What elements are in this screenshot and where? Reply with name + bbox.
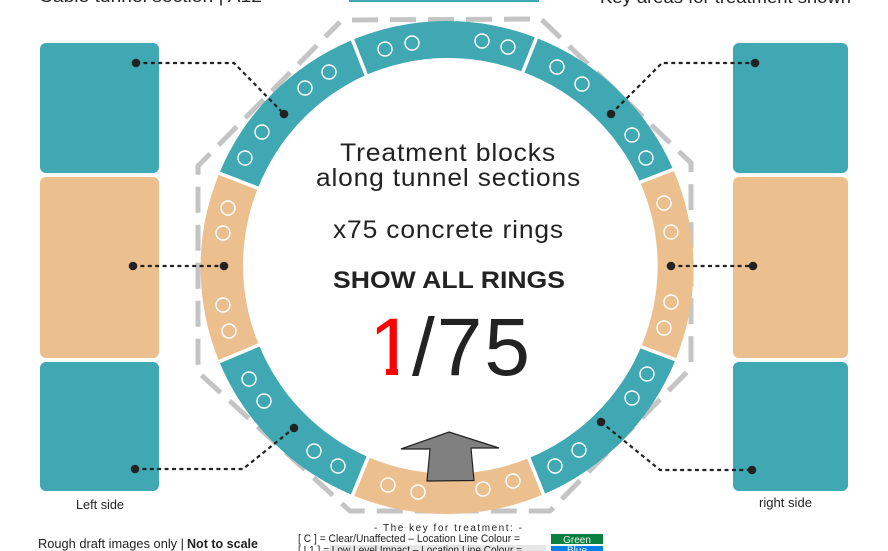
panel: right side blocks <box>733 43 848 491</box>
top centre bar <box>349 0 539 2</box>
leader: middle left <box>129 262 228 270</box>
segment: left <box>201 173 259 362</box>
ring counter <box>376 316 527 376</box>
leader: upper left <box>132 59 288 118</box>
segment: bottom <box>353 457 543 514</box>
caption: right side: right side <box>759 496 812 510</box>
ring counter: 1 <box>369 302 415 393</box>
caption: left side: Left side <box>76 498 124 512</box>
ring bolt holes <box>216 34 678 499</box>
note: not to scale: Rough draft images only | <box>38 536 184 551</box>
arrow pointing up <box>401 432 499 481</box>
segment: top <box>351 21 537 75</box>
segment: lower left <box>219 345 368 495</box>
treatment key: [ C ] = Clear/Unaffected – Location Line Colour = <box>298 533 520 545</box>
centre text: title line 1: Treatment blocks <box>340 139 556 167</box>
treatment key: - The key for treatment: - <box>374 523 522 534</box>
ring counter: /75 <box>412 302 530 393</box>
panel: left side blocks <box>40 43 159 491</box>
leader: lower right <box>597 418 756 474</box>
treatment key: Green <box>563 535 591 546</box>
segment: right <box>640 169 694 360</box>
note: not to scale: Not to scale <box>187 536 258 551</box>
ring of treatment blocks <box>201 21 694 514</box>
leader: upper right <box>607 59 759 118</box>
dashed octagon outline <box>198 19 691 511</box>
segment: lower right <box>529 347 676 494</box>
centre text: ring count: x75 concrete rings <box>333 216 564 244</box>
treatment key <box>298 523 603 551</box>
segment: upper left <box>219 41 366 188</box>
centre text: title line 2: along tunnel sections <box>316 164 581 192</box>
leader: lower left <box>131 424 298 473</box>
leader: middle right <box>667 262 757 270</box>
button label: show all rings: SHOW ALL RINGS <box>333 267 565 294</box>
note: not to scale <box>38 536 258 551</box>
segment: upper right <box>523 38 673 182</box>
